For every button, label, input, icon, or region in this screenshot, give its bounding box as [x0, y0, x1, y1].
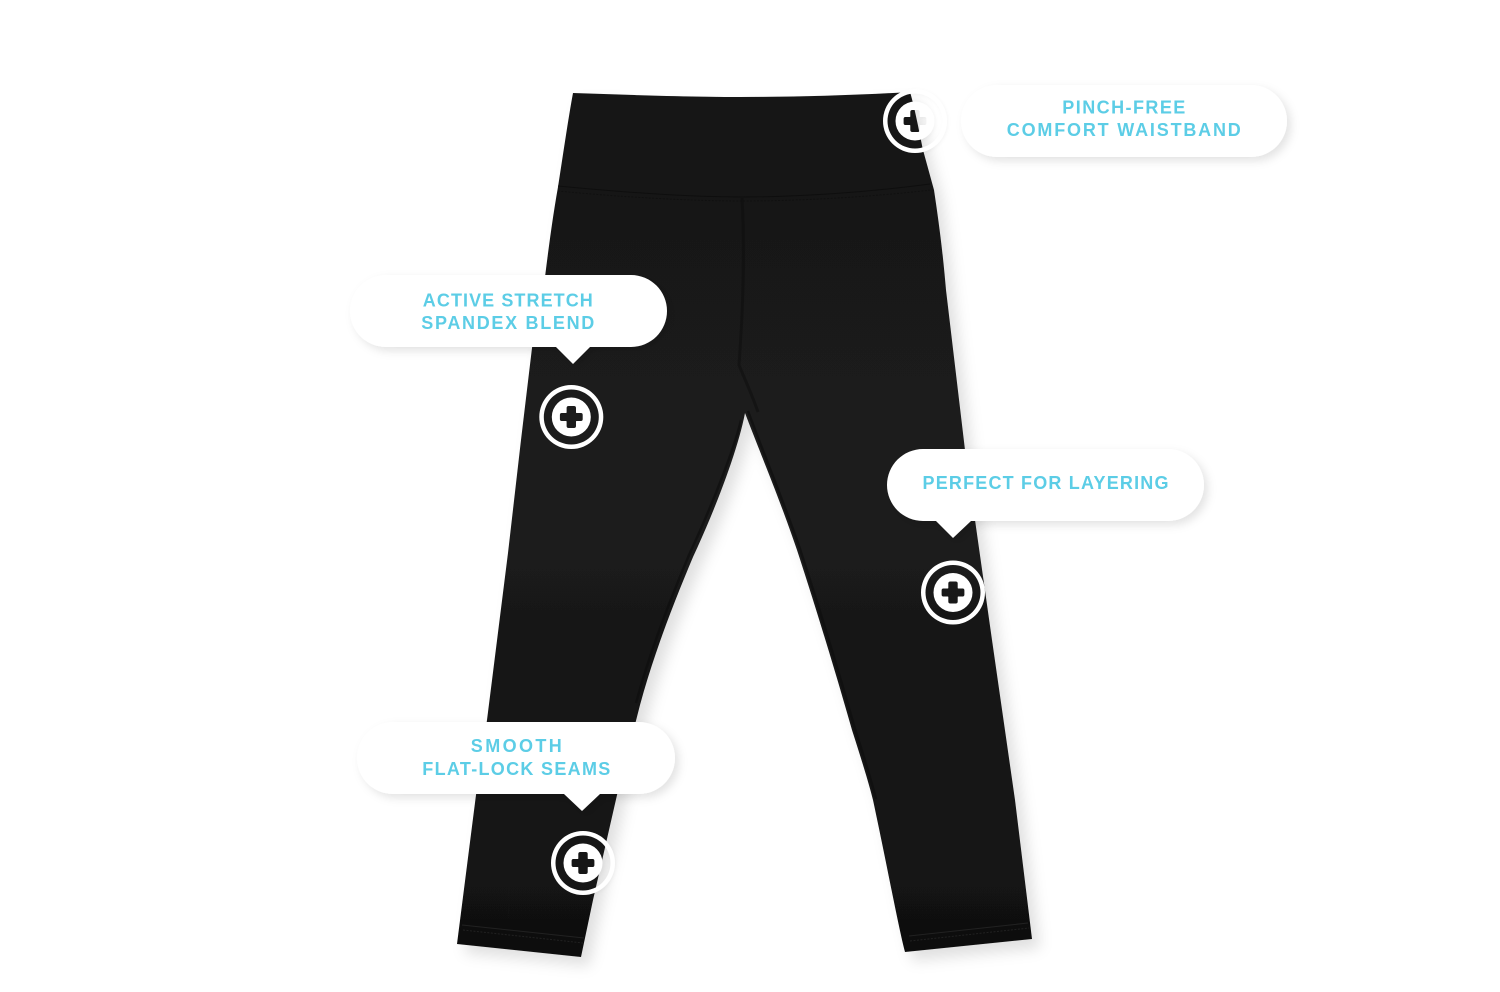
callout: stretch — [350, 275, 667, 364]
centre seam — [739, 198, 758, 412]
waistband seam — [558, 184, 931, 201]
callout: waistband: COMFORT WAISTBAND — [1007, 120, 1241, 140]
inner leg seams — [636, 411, 876, 799]
callout: seams — [357, 722, 675, 811]
callout: stretch: SPANDEX BLEND — [421, 313, 594, 333]
marker: waistband — [883, 89, 947, 153]
callout: waistband — [961, 85, 1287, 157]
callout: layering — [887, 449, 1204, 538]
marker: seams — [551, 831, 615, 895]
callout: seams: FLAT-LOCK SEAMS — [422, 759, 610, 779]
marker: layering — [921, 560, 985, 624]
hem stitching — [462, 923, 1029, 943]
leggings — [457, 92, 1032, 957]
callout: seams: SMOOTH — [471, 736, 562, 756]
marker: stretch — [539, 385, 603, 449]
callout: stretch: ACTIVE STRETCH — [423, 290, 593, 310]
callout: waistband: PINCH-FREE — [1062, 98, 1185, 118]
callout: layering: PERFECT FOR LAYERING — [922, 473, 1168, 493]
